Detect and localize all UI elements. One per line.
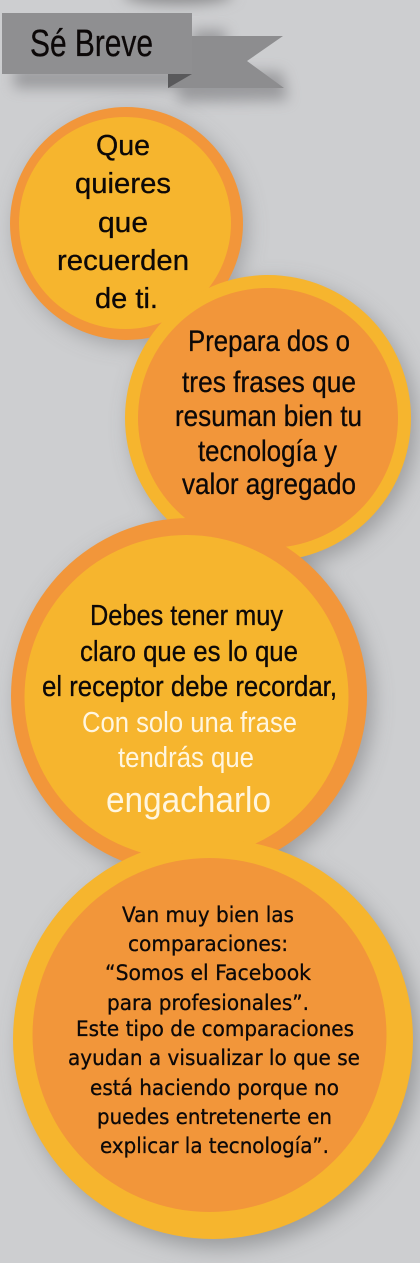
circle 1 text: que: [98, 207, 148, 239]
circle 1 text: Que: [96, 130, 150, 162]
circle 3: [11, 518, 367, 874]
circle 2 text: tecnología y: [198, 435, 337, 468]
banner shadow: [14, 30, 288, 102]
ribbon fold: [168, 74, 192, 88]
circle 4: [13, 839, 413, 1239]
circle 4 text: explicar la tecnología”.: [100, 1134, 329, 1158]
circle 1 text: de ti.: [95, 283, 158, 315]
circle 1 text: recuerden: [57, 245, 189, 277]
circle 2 text: [175, 325, 362, 501]
circle 1 ring: [10, 107, 243, 340]
circle 4 text: puedes entretenerte en: [97, 1105, 332, 1129]
circle 1 disc: [19, 117, 231, 329]
section banner: [2, 13, 288, 102]
circle 4 text: ayudan a visualizar lo que se: [68, 1046, 360, 1070]
circle 4 disc: [32, 858, 386, 1212]
circle 4 text: comparaciones:: [128, 932, 288, 956]
top shadow remnant: [123, 0, 233, 4]
circle 4 text: Van muy bien las: [122, 903, 294, 927]
circle 2 text: Prepara dos o: [188, 325, 350, 358]
circle 3 disc: [24, 535, 348, 859]
circle 4 ring: [13, 839, 413, 1239]
circle 3 text: [42, 600, 337, 820]
circle 2 text: valor agregado: [182, 468, 356, 501]
circle 3 text: claro que es lo que: [80, 636, 298, 668]
circle 2 disc: [138, 288, 398, 548]
circle 3 text: el receptor debe recordar,: [42, 671, 337, 703]
circle 4 text: “Somos el Facebook: [105, 961, 312, 985]
ribbon tail: [168, 36, 284, 88]
circle 2 ring: [125, 275, 411, 561]
circle 4 text: está haciendo porque no: [90, 1076, 339, 1100]
circle 4 text: Este tipo de comparaciones: [76, 1017, 354, 1041]
circle 4 text: para profesionales”.: [107, 991, 309, 1015]
circle 2 text: resuman bien tu: [175, 400, 362, 433]
ribbon front: [2, 13, 192, 74]
circle 3 text: engacharlo: [106, 779, 271, 820]
circle 3 text: Debes tener muy: [90, 600, 283, 632]
circle 4 text: [68, 903, 360, 1158]
circle 2 text: tres frases que: [182, 366, 356, 399]
circle 1 text: quieres: [75, 168, 171, 200]
circle 1: [10, 107, 243, 340]
circle 1 text: [57, 130, 189, 315]
circle 3 ring: [11, 518, 367, 874]
circle 3 text: tendrás que: [118, 742, 254, 774]
banner title: Sé Breve: [30, 23, 153, 65]
circle 3 text: Con solo una frase: [82, 707, 297, 739]
circle 2: [125, 275, 411, 561]
